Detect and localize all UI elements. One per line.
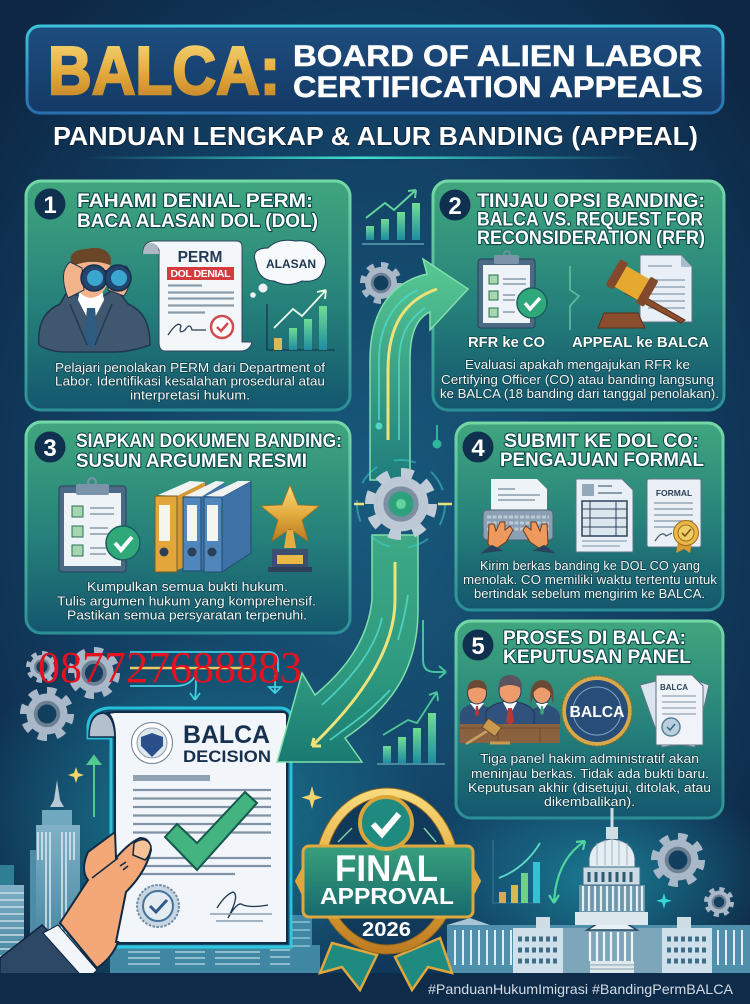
sparkle	[656, 893, 672, 909]
icon: checklist clipboard	[59, 478, 140, 572]
heading 2: RECONSIDERATION (RFR)	[477, 227, 705, 249]
icon: ALASAN thought cloud	[250, 240, 326, 298]
arrow: upper flow	[370, 259, 468, 480]
heading: BALCA: BALCA	[183, 721, 270, 749]
heading 2: TINJAU OPSI BANDING:	[477, 190, 705, 212]
heading 4	[500, 430, 704, 471]
body text 1: interpretasi hukum.	[130, 388, 250, 402]
banner	[303, 846, 473, 917]
icon: BALCA seal	[562, 676, 632, 746]
arrow: lower flow	[277, 535, 418, 762]
icon: form document	[576, 479, 633, 552]
icon: gavel and document	[598, 255, 692, 328]
title banner	[27, 26, 723, 113]
body text 4	[463, 558, 718, 601]
icon: BALCA seal: BALCA	[570, 704, 624, 721]
icon: judges panel	[460, 675, 560, 744]
number 1	[34, 188, 66, 220]
heading: DECISION: DECISION	[183, 747, 271, 766]
body text 3: Kumpulkan semua bukti hukum.	[87, 579, 288, 594]
number 3: 3	[43, 435, 57, 462]
heading 2: BALCA VS. REQUEST FOR	[477, 208, 703, 230]
icon: ALASAN thought cloud: ALASAN	[266, 257, 316, 271]
body text 3	[57, 579, 316, 622]
skyline: left city	[0, 780, 320, 975]
heading 4: PENGAJUAN FORMAL	[500, 449, 704, 471]
connector: dot line	[436, 425, 438, 440]
panel 3	[26, 422, 350, 633]
body text 1: Pelajari penolakan PERM dari Department of	[55, 360, 325, 375]
number 5: 5	[471, 633, 485, 660]
gears: right	[655, 837, 732, 915]
title: line one: BOARD OF ALIEN LABOR	[293, 40, 702, 73]
icon: formal certificate: FORMAL	[656, 488, 692, 498]
icon: PERM denial document: DOL DENIAL	[170, 268, 231, 280]
body text 5: meninjau berkas. Tidak ada bukti baru.	[471, 766, 709, 781]
gear: upper centre	[363, 265, 399, 301]
chart: panel 1 bars	[267, 290, 335, 350]
chart: capitol side bars	[493, 840, 541, 903]
panel 5	[456, 621, 723, 818]
arrow: left up arrow	[88, 756, 100, 817]
icon: PERM denial document: PERM	[178, 249, 222, 266]
badge: final approval	[296, 788, 480, 990]
hashtags: #PanduanHukumImigrasi #BandingPermBALCA	[428, 981, 734, 997]
icon: hand holding document	[0, 832, 151, 1004]
panel 1	[26, 181, 350, 410]
heading 5: PROSES DI BALCA:	[503, 627, 686, 649]
title: BALCA: BALCA:	[48, 33, 280, 109]
label: RFR ke CO: RFR ke CO	[468, 334, 545, 351]
label: APPEAL ke BALCA: APPEAL ke BALCA	[572, 334, 709, 351]
body text 2: Evaluasi apakah mengajukan RFR ke	[465, 357, 690, 372]
heading 1: BACA ALASAN DOL (DOL)	[77, 210, 318, 232]
ribbons	[320, 938, 452, 990]
body text 5: dikembalikan).	[544, 794, 635, 809]
icon: round stamp	[137, 885, 179, 927]
title: line two: CERTIFICATION APPEALS	[293, 71, 703, 104]
icon: BALCA documents stack: BALCA	[660, 683, 688, 692]
number 5	[462, 630, 494, 660]
capitol building	[447, 808, 750, 973]
body text 3: Pastikan semua persyaratan terpenuhi.	[67, 608, 307, 622]
flow lines above decision	[130, 652, 281, 700]
seal: department	[132, 722, 172, 764]
heading 1	[77, 190, 318, 232]
chart: lower centre	[377, 692, 445, 764]
body text 2: Certifying Officer (CO) atau banding langsung	[441, 372, 714, 387]
number 4: 4	[471, 435, 485, 462]
heading 5	[503, 627, 691, 668]
icon: RFR clipboard	[478, 251, 547, 328]
number 3	[34, 432, 66, 462]
body text 1	[55, 360, 325, 402]
icon: BALCA documents stack	[640, 675, 709, 747]
body text 5	[468, 751, 711, 809]
badge: final approval: APPROVAL	[320, 883, 454, 909]
body text 5: Keputusan akhir (disetujui, ditolak, atau	[468, 780, 711, 795]
background chart: upper centre	[362, 190, 424, 244]
number 2	[440, 190, 470, 220]
icon: binders	[155, 481, 251, 572]
arrow: curved double arrow	[549, 841, 585, 903]
body text 4: menolak. CO memiliki waktu tertentu untuk	[463, 572, 718, 587]
body text 4: Kirim berkas banding ke DOL CO yang	[480, 558, 700, 573]
number 4	[462, 432, 494, 462]
body text 3: Tulis argumen hukum yang komprehensif.	[57, 594, 316, 608]
body text 1: Labor. Identifikasi kesalahan prosedural atau	[55, 374, 325, 388]
icon: formal certificate	[647, 479, 701, 553]
decision document	[88, 708, 291, 947]
connector: small flow arrow	[423, 620, 446, 678]
watermark: phone number: 087727688883	[38, 643, 302, 692]
sparkles	[68, 767, 322, 809]
subtitle: PANDUAN LENGKAP & ALUR BANDING (APPEAL)	[53, 121, 698, 151]
body text 2	[440, 357, 719, 401]
heading 4: SUBMIT KE DOL CO:	[504, 430, 699, 452]
heading 1: FAHAMI DENIAL PERM:	[77, 190, 313, 212]
badge: final approval: 2026	[362, 919, 411, 941]
icon: large green check	[165, 792, 257, 870]
icon: star trophy	[261, 485, 319, 572]
panel 4	[456, 423, 723, 610]
icon: chevron	[570, 266, 579, 330]
heading 2	[477, 190, 705, 249]
number 1: 1	[43, 192, 57, 219]
body text 5: Tiga panel hakim administratif akan	[480, 751, 699, 766]
badge: final approval: FINAL	[335, 848, 438, 889]
icon: man with binoculars	[39, 248, 150, 352]
heading 3: SIAPKAN DOKUMEN BANDING:	[76, 430, 342, 452]
bottom band	[0, 973, 750, 1004]
heading 3	[76, 430, 342, 472]
signature	[210, 892, 272, 921]
body text 4: bertindak sebelum mengirim ke BALCA.	[474, 586, 705, 601]
panel 2	[433, 181, 724, 410]
gears: left cluster	[24, 651, 116, 737]
body text 2: ke BALCA (18 banding dari tanggal penolakan).	[440, 386, 719, 401]
heading 3: SUSUN ARGUMEN RESMI	[76, 450, 307, 472]
number 2: 2	[448, 193, 462, 220]
icon: central gear	[354, 460, 452, 548]
icon: PERM denial document	[143, 241, 252, 351]
heading 5: KEPUTUSAN PANEL	[503, 646, 691, 668]
icon: keyboard with hands	[483, 479, 553, 552]
